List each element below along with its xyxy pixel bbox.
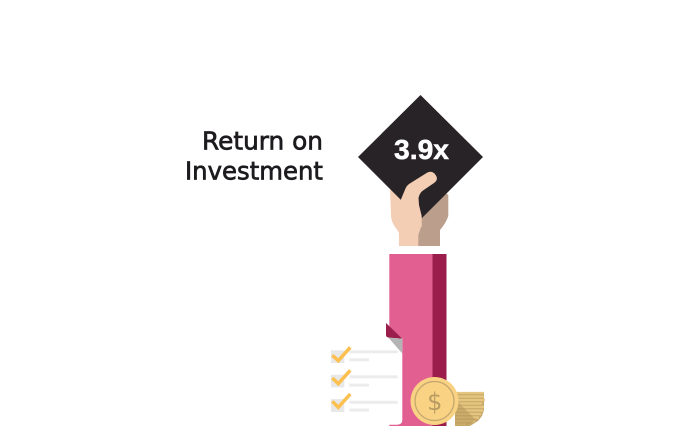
pink column <box>389 254 446 426</box>
heading: Return on Investment <box>185 126 323 186</box>
checklist row 1 <box>331 347 398 363</box>
icon: dollar coin <box>410 377 458 425</box>
icon: hand back shade <box>418 180 448 246</box>
checklist row 3 <box>331 394 398 412</box>
icon: hand palm <box>390 185 422 246</box>
heading: Return on Investment: Investment <box>185 156 323 186</box>
heading: Return on Investment: Return on <box>202 126 323 156</box>
value: 3.9x: 3.9x <box>394 134 450 165</box>
icon: hand fingers over sign <box>395 172 437 227</box>
icon: dollar coin: $ <box>427 388 442 416</box>
diamond sign <box>358 95 483 220</box>
document <box>325 323 402 425</box>
icon: coin stack <box>455 392 485 426</box>
checklist row 2 <box>331 370 398 387</box>
